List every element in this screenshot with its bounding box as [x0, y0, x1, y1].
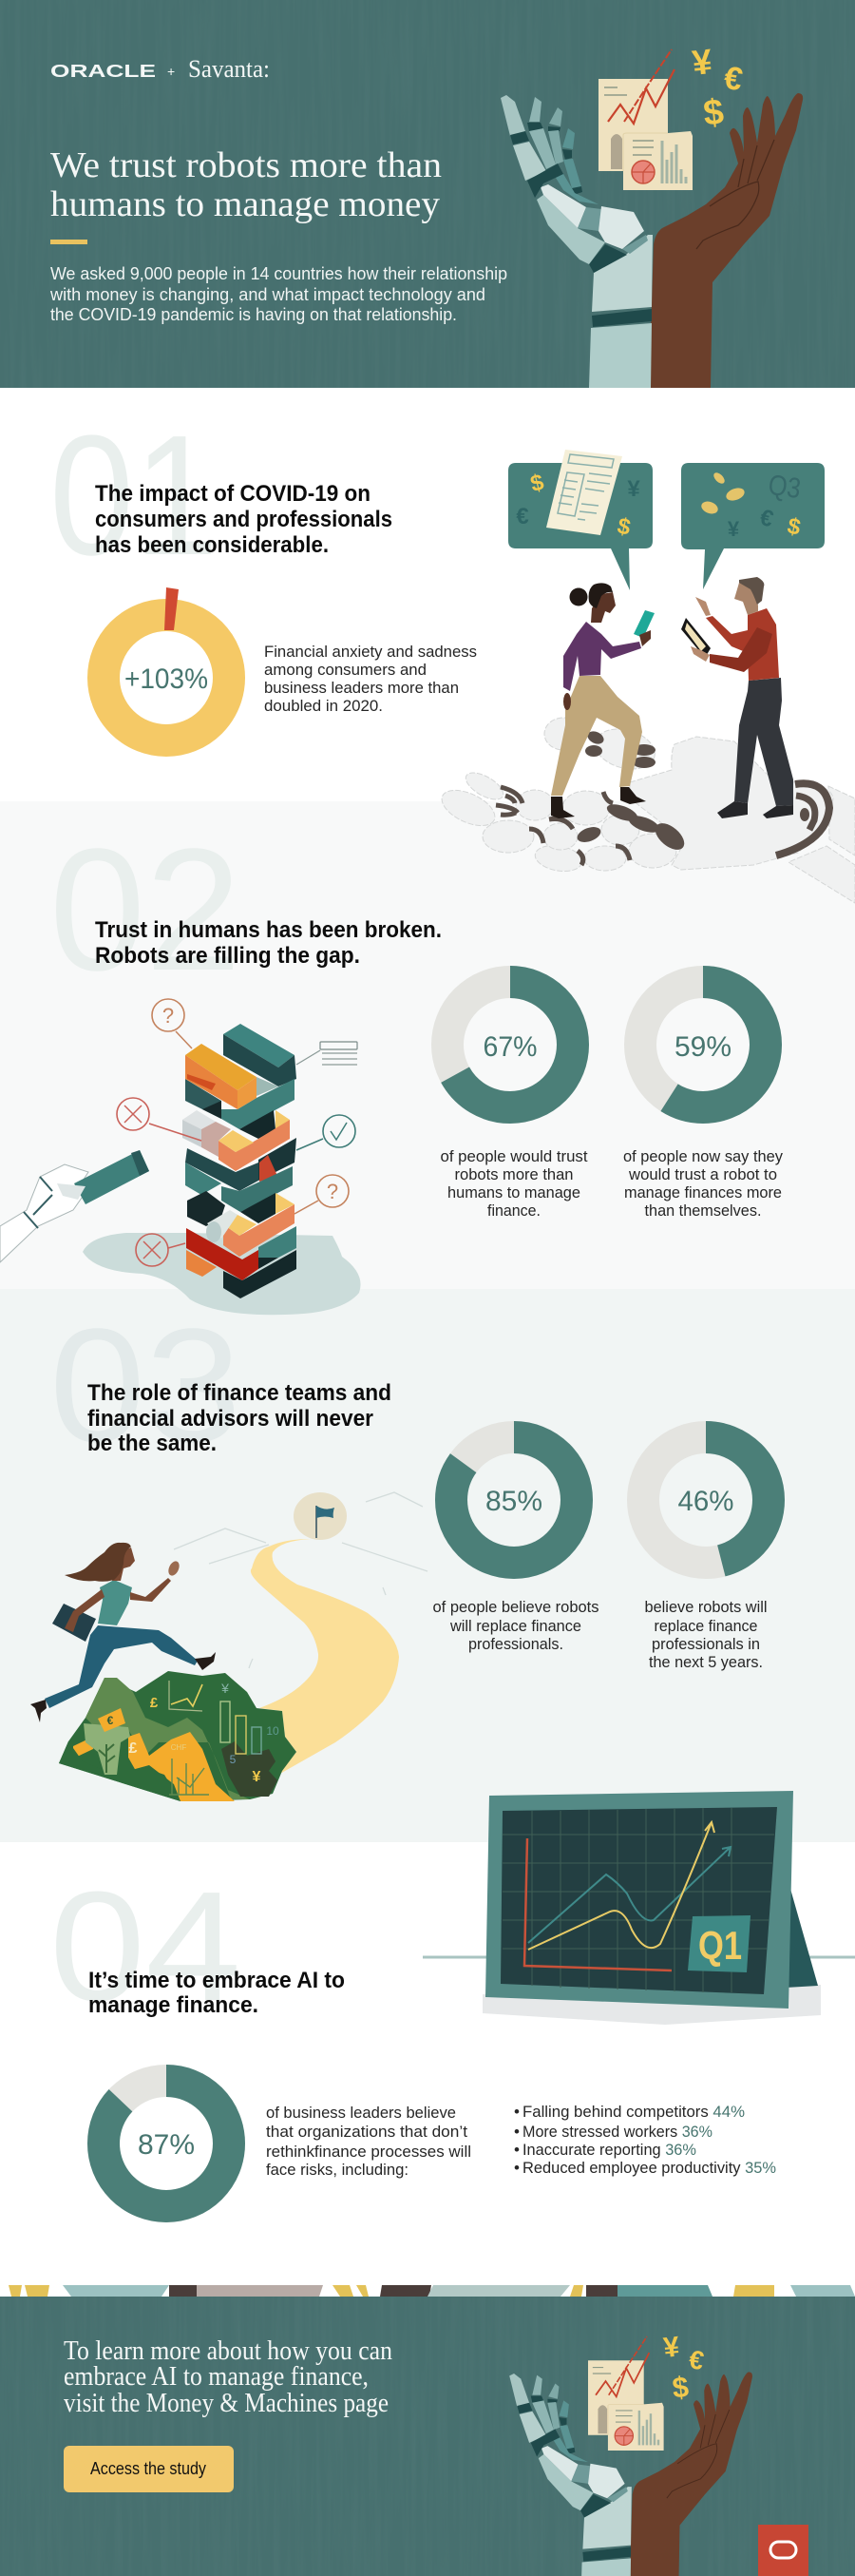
icon: question callout: ? — [162, 1004, 174, 1028]
illustration: hill with charts: £ — [129, 1740, 138, 1757]
illustration: hill with charts: CHF — [171, 1743, 186, 1752]
illustration: hill with charts: 10 — [266, 1724, 279, 1738]
description text: among consumers and — [264, 661, 427, 679]
heading — [95, 481, 392, 558]
speech bubble: left: ¥ — [627, 476, 640, 502]
icon: question callout: ? — [327, 1180, 338, 1203]
donut chart: 87%: 87% — [138, 2129, 195, 2161]
caption: 46% — [644, 1598, 768, 1671]
illustration: robot and human hands: ¥ — [662, 2331, 681, 2364]
illustration: robot and human hands: € — [687, 2344, 706, 2375]
risk list: • — [514, 2159, 520, 2177]
caption: 67%: of people would trust — [441, 1147, 588, 1165]
caption: 85% — [433, 1598, 598, 1653]
call to action text: embrace AI to manage finance, — [64, 2361, 369, 2392]
intro text: the COVID-19 pandemic is having on that relationship. — [50, 304, 457, 324]
illustration: robot arm pulling block — [0, 1150, 149, 1262]
description text: face risks, including: — [266, 2161, 408, 2179]
title: humans to manage money — [50, 184, 440, 224]
description text: Financial anxiety and sadness — [264, 643, 477, 661]
icon: cross callout — [136, 1234, 185, 1266]
icon: question callout — [294, 1175, 349, 1214]
call to action text: To learn more about how you can — [64, 2336, 392, 2366]
donut chart: 46% — [643, 1437, 769, 1563]
illustration: hill with charts: £ — [150, 1695, 159, 1711]
caption: 85%: of people believe robots — [433, 1598, 598, 1616]
section number 03: 03 — [49, 1296, 241, 1476]
button: access the study — [64, 2446, 234, 2492]
caption: 46%: the next 5 years. — [649, 1653, 763, 1671]
illustration: hill with charts: ¥ — [253, 1769, 261, 1785]
donut chart: 85% — [451, 1437, 577, 1563]
heading: manage finance. — [88, 1992, 258, 2018]
panel: section 03 — [30, 1296, 769, 1801]
logo: Oracle + Savanta: + — [167, 64, 175, 79]
heading: consumers and professionals — [95, 507, 392, 532]
panel: footer — [0, 2285, 855, 2576]
icon: question callout — [152, 999, 192, 1048]
risk list: Reduced employee productivity 35% — [522, 2159, 776, 2177]
caption: 46%: replace finance — [654, 1617, 758, 1635]
description text: of business leaders believe — [266, 2104, 456, 2122]
heading: financial advisors will never — [87, 1406, 373, 1432]
risk list: Inaccurate reporting 36% — [522, 2141, 696, 2159]
speech bubble: right: € — [757, 505, 776, 532]
caption: 67%: robots more than — [454, 1165, 574, 1183]
donut chart: 87% — [104, 2081, 229, 2206]
heading — [95, 917, 442, 969]
title — [50, 145, 442, 224]
donut chart: 59%: 59% — [674, 1031, 732, 1063]
illustration: hill with charts: ¥ — [220, 1681, 229, 1696]
heading: has been considerable. — [95, 532, 329, 558]
speech bubble: left: € — [516, 504, 529, 529]
donut chart: 46%: 46% — [678, 1486, 733, 1517]
caption: 67%: humans to manage — [447, 1183, 580, 1201]
caption: 59%: manage finances more — [624, 1183, 782, 1201]
illustration: hill with charts: 5 — [230, 1753, 237, 1766]
heading — [88, 1968, 345, 2018]
icon: human hand — [649, 93, 803, 388]
title: We trust robots more than — [50, 145, 442, 185]
panel: section 01 — [49, 400, 855, 903]
illustration: running woman — [30, 1543, 216, 1722]
description text: rethinkfinance processes will — [266, 2143, 471, 2161]
panel: section 02 — [0, 812, 783, 1315]
donut chart: 67%: 67% — [483, 1031, 538, 1063]
caption: 67% — [441, 1147, 588, 1220]
heading — [87, 1380, 391, 1456]
heading: Trust in humans has been broken. — [95, 917, 442, 943]
heading: be the same. — [87, 1431, 217, 1456]
icon: currency symbols: € — [721, 60, 746, 98]
panel: hero — [0, 0, 855, 388]
section number 04: 04 — [49, 1859, 241, 2033]
call to action text — [64, 2336, 392, 2418]
caption: 85%: will replace finance — [449, 1617, 581, 1635]
illustration: Q1 chart board — [423, 1791, 855, 2025]
caption: 85%: professionals. — [468, 1635, 563, 1653]
donut chart: 67% — [447, 982, 573, 1107]
section number 01: 01 — [49, 400, 218, 591]
description text: that organizations that don’t — [266, 2123, 467, 2141]
risk list: More stressed workers 36% — [522, 2123, 712, 2141]
speech bubble: left — [508, 450, 653, 590]
title accent bar — [50, 240, 87, 244]
caption: 59%: than themselves. — [644, 1201, 762, 1220]
heading: The impact of COVID-19 on — [95, 481, 370, 507]
illustration: robot and human hands — [509, 2331, 752, 2576]
description text — [266, 2104, 471, 2179]
illustration: robot and human hands: $ — [671, 2371, 691, 2405]
risk list: Falling behind competitors 44% — [522, 2103, 745, 2121]
illustration: fingerprint hand ground — [436, 718, 855, 903]
intro text: with money is changing, and what impact technology and — [49, 284, 485, 304]
speech bubble: right: Q3 — [767, 470, 803, 505]
intro text — [49, 263, 507, 324]
call to action text: visit the Money & Machines page — [64, 2388, 389, 2418]
illustration: hill with charts: € — [107, 1714, 114, 1727]
risk list — [514, 2103, 776, 2177]
caption: 46%: professionals in — [652, 1635, 760, 1653]
panel: section 04 — [49, 1791, 855, 2206]
speech bubble: left: $ — [528, 470, 547, 497]
risk list: • — [514, 2103, 520, 2121]
caption: 59% — [623, 1147, 783, 1220]
speech bubble: left: $ — [615, 513, 634, 541]
icon: receipt — [546, 450, 622, 535]
risk list: • — [514, 2141, 520, 2159]
intro text: We asked 9,000 people in 14 countries how their relationship — [50, 263, 507, 283]
illustration: robot and human hands — [501, 42, 803, 388]
illustration: hill with charts — [59, 1671, 296, 1801]
icon: currency symbols: ¥ — [691, 42, 714, 83]
donut chart: +103%: +103% — [124, 663, 208, 695]
speech bubble: right: $ — [785, 513, 804, 541]
logo: Oracle + Savanta: Savanta: — [188, 55, 270, 83]
logo: Oracle + Savanta: ORACLE — [50, 61, 156, 81]
illustration: block tower — [83, 999, 361, 1315]
illustration: road to flag — [174, 1492, 428, 1775]
icon: currency symbols: $ — [701, 92, 726, 134]
speech bubble: right — [681, 463, 825, 589]
donut chart: +103% — [104, 587, 229, 740]
Q1 label — [688, 1915, 750, 1972]
icon: robot hand — [501, 95, 653, 388]
logo: Oracle mark — [758, 2525, 808, 2576]
illustration: man with tablet — [681, 577, 793, 818]
heading: The role of finance teams and — [87, 1380, 391, 1406]
description text: business leaders more than — [264, 679, 459, 697]
caption: 46%: believe robots will — [644, 1598, 768, 1616]
caption: 59%: would trust a robot to — [628, 1165, 777, 1183]
donut chart: 59% — [640, 982, 766, 1107]
heading: Robots are filling the gap. — [95, 943, 360, 969]
caption: 59%: of people now say they — [623, 1147, 783, 1165]
icon: check callout — [296, 1115, 355, 1150]
caption: 67%: finance. — [487, 1201, 541, 1220]
logo: Oracle + Savanta — [50, 55, 270, 83]
button: access the study: Access the study — [90, 2459, 206, 2478]
heading: It’s time to embrace AI to — [88, 1968, 345, 1993]
donut chart: 85%: 85% — [485, 1486, 542, 1517]
Q1 label: Q1 — [698, 1923, 742, 1968]
section number 02: 02 — [49, 812, 241, 1007]
speech bubble: right: ¥ — [728, 517, 740, 541]
icon: cross callout — [117, 1098, 201, 1141]
icon: document lines — [296, 1042, 357, 1065]
decorative pattern strip — [9, 2285, 855, 2297]
risk list: • — [514, 2123, 520, 2141]
icon: financial papers — [598, 49, 693, 190]
icon: currency symbols — [691, 42, 746, 134]
illustration: woman with phone — [551, 583, 655, 818]
description text: doubled in 2020. — [264, 697, 383, 715]
description text — [264, 643, 477, 715]
